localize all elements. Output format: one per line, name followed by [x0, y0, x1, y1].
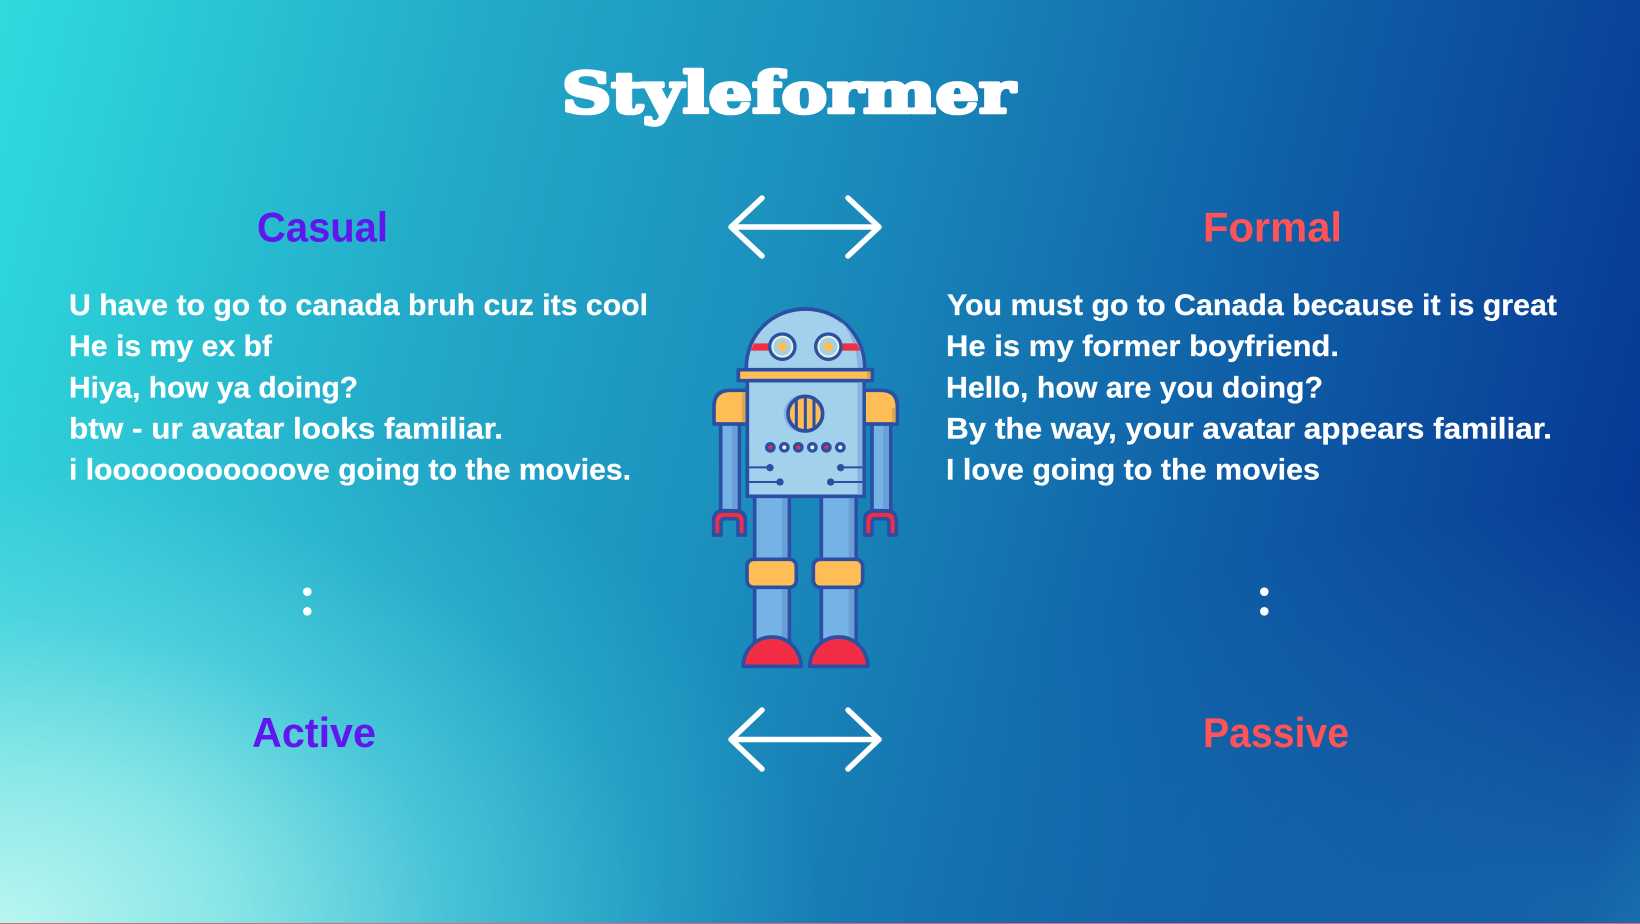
title: Styleformer — [562, 60, 1017, 126]
robot legs — [755, 496, 856, 643]
separator dots: left — [303, 587, 312, 616]
text block: casual sentences: btw - ur avatar looks familiar. — [69, 412, 503, 445]
text block: formal sentences: By the way, your avatar appears familiar. — [946, 412, 1552, 445]
text block: casual sentences: He is my ex bf — [69, 330, 273, 363]
heading: Formal: Formal — [1203, 204, 1342, 251]
separator dots: right — [1260, 587, 1269, 616]
text block: casual sentences: U have to go to canada bruh cuz its cool — [69, 289, 648, 322]
robot speaker grille — [784, 395, 823, 433]
robot hands — [714, 511, 896, 535]
text block: casual sentences: i looooooooooove going to the movies. — [69, 453, 631, 486]
robot brim — [738, 370, 872, 381]
robot feet — [743, 637, 868, 666]
arrow: casual to formal — [731, 198, 879, 256]
text block: casual sentences — [69, 289, 648, 486]
heading: Active: Active — [252, 709, 376, 756]
arrow: active to passive — [731, 710, 879, 769]
text block: formal sentences: I love going to the movies — [946, 453, 1320, 486]
robot indicator lights — [765, 442, 846, 453]
icon: robot — [714, 309, 897, 666]
text block: casual sentences: Hiya, how ya doing? — [69, 371, 358, 404]
robot body — [747, 381, 864, 496]
robot head — [746, 309, 865, 371]
robot shoulders — [714, 390, 897, 424]
text block: formal sentences: You must go to Canada because it is great — [947, 289, 1557, 322]
text block: formal sentences: Hello, how are you doing? — [946, 371, 1323, 404]
robot circuit lines — [748, 464, 862, 486]
heading: Casual: Casual — [257, 204, 388, 251]
text block: formal sentences — [946, 289, 1557, 486]
text block: formal sentences: He is my former boyfriend. — [946, 330, 1339, 363]
robot arms — [721, 423, 891, 511]
heading: Passive: Passive — [1203, 709, 1349, 756]
robot knees — [747, 559, 863, 587]
